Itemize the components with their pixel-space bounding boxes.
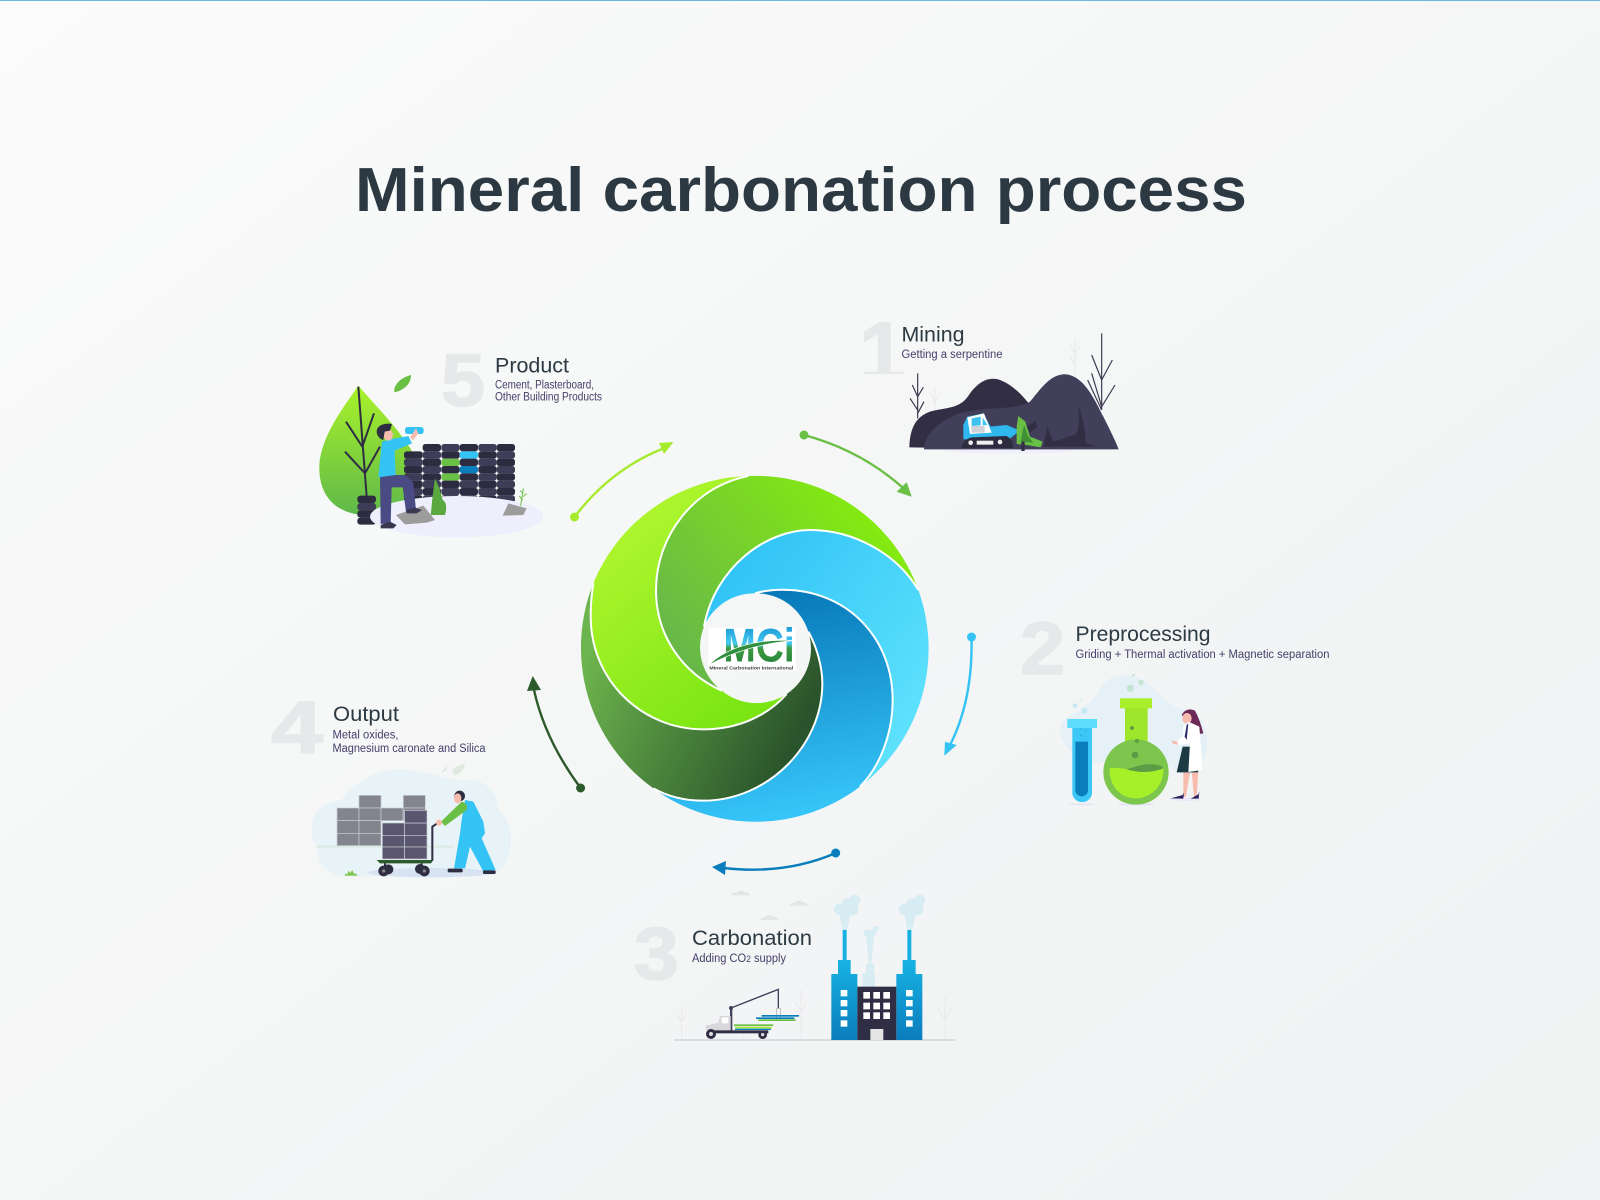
description: carbonation: Adding CO2 supply [692,953,786,965]
scientist [1171,709,1203,799]
title: Mineral carbonation process [355,156,1247,225]
petal: light green [591,476,787,729]
step 4: output [271,686,511,877]
description: output: Magnesium caronate and Silica [332,743,486,755]
petal: dark green [581,583,822,801]
number 1: 1 [859,305,906,399]
illustration: flask and scientist [1060,674,1207,806]
description: mining: Getting a serpentine [902,349,1002,361]
petal: blue [653,590,893,822]
number 2: 2 [1020,607,1065,690]
test tube [1067,719,1097,802]
arrow: output to product [527,676,585,792]
truck with crane [706,989,799,1039]
petal: mid green [656,476,918,691]
arrow: carbonation to output [712,848,840,875]
illustration: hills and bulldozer [909,333,1119,454]
factory [831,895,925,1040]
heading: preprocessing: Preprocessing [1076,623,1210,646]
stacked grey boxes [337,795,425,846]
big leaf [319,386,413,515]
rocks and plants [396,478,527,524]
illustration: worker pushing cart [312,764,511,877]
description: product: Cement, Plasterboard, [495,379,594,391]
cart [377,810,437,876]
description: product [495,379,602,404]
step 3: carbonation [634,890,955,1041]
person placing block [377,424,424,528]
illustration: factory and truck [674,890,955,1041]
heading: carbonation: Carbonation [692,927,812,950]
step 1: mining [864,322,1119,454]
logo: MCi: MCi [723,619,795,672]
step 5: product [319,339,602,537]
description: preprocessing: Griding + Thermal activation + Magnetic separation [1076,649,1330,661]
small leaf [394,375,411,392]
number 3: 3 [634,912,679,995]
petal: cyan [704,530,929,787]
arrow: product to mining [570,442,674,522]
illustration: building wall with leaf [319,375,543,537]
step 2: preprocessing [1020,607,1330,806]
heading: mining: Mining [902,324,964,347]
worker [436,791,496,874]
bare tree [345,387,380,497]
number 5: 5 [441,339,485,422]
logo: MCi: Mineral Carbonation International [709,665,793,670]
number 4: 4 [271,686,323,769]
arrow: mining to preprocessing [800,430,912,497]
description: output: Metal oxides, [332,729,398,741]
description: output [332,729,486,755]
heading: output: Output [333,703,399,726]
round flask [1103,698,1169,805]
central swirl diagram [581,476,929,822]
heading: product: Product [495,355,569,378]
arrow: preprocessing to carbonation [944,632,976,756]
wall of blocks [404,444,515,503]
description: product: Other Building Products [495,392,602,404]
